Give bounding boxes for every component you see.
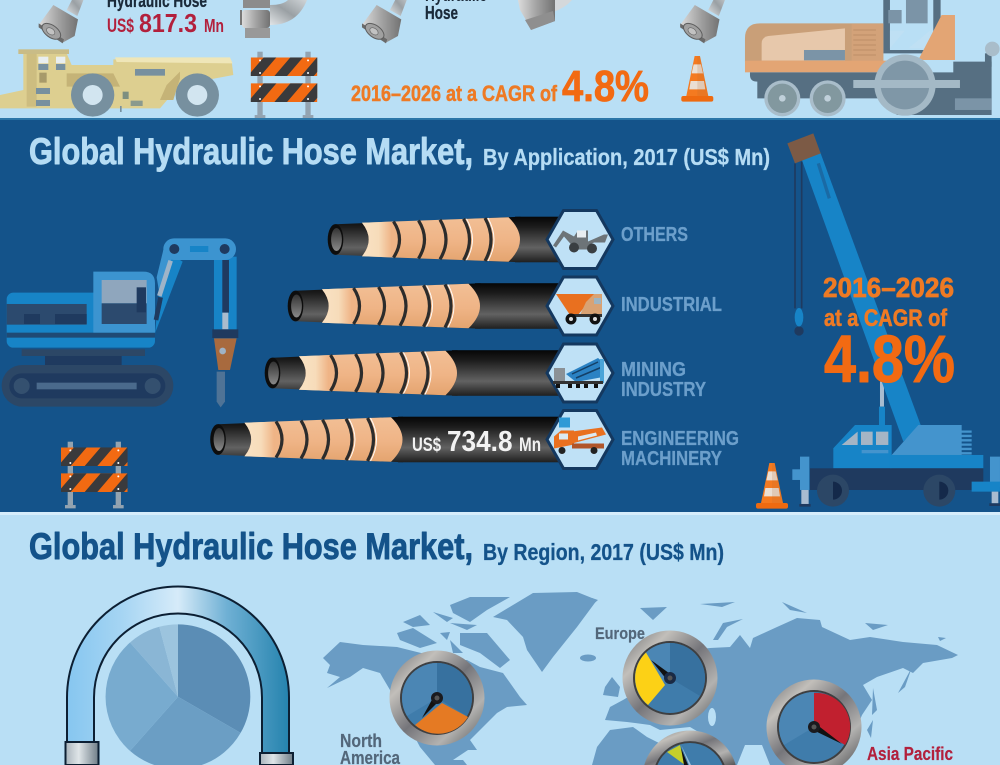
gauge: Middle East and Africa xyxy=(644,730,736,765)
text: region labels: Europe xyxy=(595,624,645,643)
text block: hydraulic hose value xyxy=(107,0,224,38)
icon: hose fitting middle xyxy=(362,0,409,43)
icon: engineering hexagon bucket truck xyxy=(547,410,613,468)
heading: by region: By Region, 2017 (US$ Mn) xyxy=(483,539,724,565)
icon: road paver xyxy=(745,0,1000,116)
icon: others hexagon backhoe xyxy=(547,210,613,268)
text: engineering machinery value: Mn xyxy=(519,435,541,456)
icon: crane xyxy=(787,133,1000,507)
icon: hose fitting left xyxy=(39,0,85,43)
heading: by application: Global Hydraulic Hose Market, xyxy=(29,131,473,172)
chart: hose bar others xyxy=(328,217,575,262)
text block: hydraulic hose value: Mn xyxy=(204,16,224,36)
chart: hose arch around pie xyxy=(66,586,293,765)
text: application labels: MACHINERY xyxy=(621,448,723,470)
text: region labels xyxy=(340,624,953,765)
icon: second elbow fitting xyxy=(518,0,572,30)
heading: by application: By Application, 2017 (US$ Mn) xyxy=(483,144,770,170)
chart: hose bar engineering machinery xyxy=(210,417,578,462)
text block: hydraulic hose value: US$ xyxy=(107,16,134,37)
text: region labels: North xyxy=(340,731,382,751)
gauge: Europe xyxy=(622,630,718,726)
icon: hose fitting right xyxy=(680,0,727,43)
icon: excavator xyxy=(2,238,238,407)
text: application labels: INDUSTRY xyxy=(621,379,707,401)
chart: world map xyxy=(323,592,958,765)
text: engineering machinery value: US$ xyxy=(412,435,441,456)
chart: regional pie xyxy=(106,624,250,765)
text: crane CAGR callout: 4.8% xyxy=(824,322,955,397)
text: region labels: Asia Pacific xyxy=(867,744,953,764)
text: second hose label xyxy=(425,0,487,23)
text: crane CAGR callout xyxy=(823,272,955,397)
text: application labels xyxy=(621,224,739,470)
icon: road barrier top xyxy=(246,52,332,118)
text: crane CAGR callout: at a CAGR of xyxy=(824,305,948,332)
icon: industrial hexagon dump truck xyxy=(547,277,613,335)
text: top CAGR callout: 4.8% xyxy=(562,62,649,111)
text: top CAGR callout xyxy=(351,62,649,111)
heading: by region: Global Hydraulic Hose Market, xyxy=(29,526,473,567)
panel: application section background xyxy=(0,118,1000,515)
icon: mining hexagon mixer truck xyxy=(547,344,613,402)
chart: hose bar mining industry xyxy=(265,350,577,396)
panel: top strip background xyxy=(0,0,1000,118)
text: second hose label: Hose xyxy=(425,3,458,23)
gauge: North America xyxy=(390,650,484,746)
chart: hose bar industrial xyxy=(288,283,575,329)
text: engineering machinery value: 734.8 xyxy=(447,426,512,458)
text: application labels: INDUSTRIAL xyxy=(621,294,722,316)
icon: traffic cone lower xyxy=(756,463,788,509)
icon: road barrier lower xyxy=(56,442,142,508)
icon: mining truck xyxy=(0,49,233,117)
text: application labels: MINING xyxy=(621,359,686,381)
gauge: Asia Pacific xyxy=(766,680,862,765)
text: application labels: OTHERS xyxy=(621,224,688,246)
text: top CAGR callout: 2016–2026 at a CAGR of xyxy=(351,81,558,106)
icon: elbow fitting xyxy=(240,0,307,38)
icon: traffic cone top xyxy=(681,56,713,102)
text: crane CAGR callout: 2016–2026 xyxy=(823,272,954,303)
text: engineering machinery value xyxy=(412,426,541,458)
text: application labels: ENGINEERING xyxy=(621,428,739,450)
text block: hydraulic hose value: 817.3 xyxy=(139,8,197,38)
